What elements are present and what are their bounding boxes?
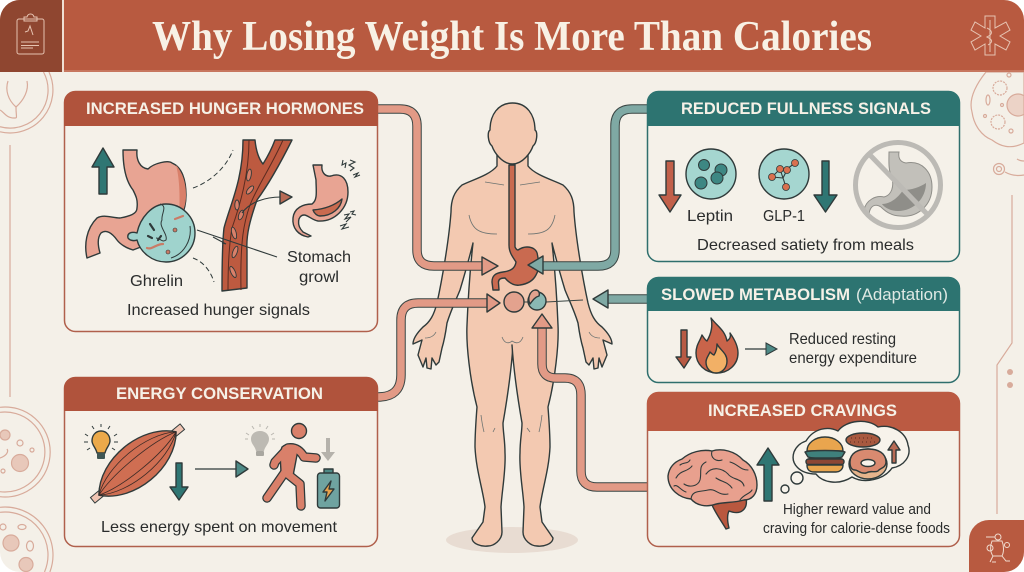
- arrow: left bottom connector: [378, 294, 500, 397]
- icon: GLP-1 circle: [759, 149, 809, 199]
- decoration: right cell top: [971, 72, 1024, 147]
- label: Leptin: Leptin: [687, 208, 733, 225]
- head: [488, 103, 537, 164]
- panel: increased hunger hormones: [64, 91, 378, 332]
- icon: walking person: [267, 424, 316, 506]
- body silhouette right half: [512, 150, 612, 546]
- icon box: clipboard: [0, 0, 62, 72]
- icon: small up arrow: [888, 441, 900, 463]
- caption: Decreased satiety from meals: [697, 237, 914, 254]
- decoration: right circuit line: [994, 159, 1024, 514]
- icon: up arrow: [92, 148, 114, 194]
- caption: Less energy spent on movement: [101, 519, 338, 536]
- body silhouette left half: [413, 150, 513, 546]
- icon: blood vessel: [222, 140, 292, 291]
- arrow: right middle connector: [593, 290, 647, 308]
- icon: flame: [696, 318, 738, 373]
- panel: reduced fullness signals: [647, 91, 960, 262]
- heading: REDUCED FULLNESS SIGNALS: [681, 100, 931, 118]
- icon: muscle: [90, 423, 186, 504]
- icon: thought bubble: [781, 421, 909, 493]
- arrow: to caption: [745, 343, 777, 355]
- panel: energy conservation: [64, 377, 378, 546]
- organs: gut and target circles: [504, 290, 583, 312]
- decoration: stethoscope emblem: [0, 72, 53, 133]
- caption: Reduced resting: [789, 331, 896, 348]
- arrow: right bottom connector: [532, 314, 647, 487]
- icon: crossed-out stomach: [856, 142, 940, 228]
- heading suffix: (Adaptation): [856, 286, 948, 304]
- label: Stomach growl: growl: [299, 269, 339, 286]
- heading: INCREASED CRAVINGS: [708, 402, 897, 420]
- title banner: [0, 0, 1024, 72]
- caption second line: energy expenditure: [789, 350, 917, 367]
- label: GLP-1: GLP-1: [763, 208, 805, 225]
- heading: SLOWED METABOLISM: [661, 286, 850, 304]
- title text: Why Losing Weight Is More Than Calories: [152, 14, 872, 60]
- icon: patty: [846, 433, 880, 447]
- arrow: to person: [195, 461, 248, 477]
- panel: slowed metabolism: [647, 277, 960, 382]
- icon: star of life: [971, 16, 1010, 55]
- decoration: left cell bottom: [0, 507, 53, 572]
- panel: increased cravings: [647, 392, 960, 546]
- arrow: left top connector: [378, 109, 498, 275]
- body contour lines: [425, 182, 600, 432]
- icon: red down arrow: [659, 161, 681, 212]
- icon: red down arrow: [676, 330, 691, 368]
- caption: Higher reward value and: [783, 501, 931, 518]
- esophagus and stomach: [492, 165, 538, 290]
- body figure: [378, 103, 647, 553]
- icon: teal down arrow: [814, 161, 837, 212]
- icon: brain: [668, 450, 757, 529]
- icon: battery: [318, 469, 340, 508]
- ground shadow: [446, 527, 578, 553]
- decoration: left cell top: [0, 407, 50, 497]
- curved arrow: [242, 191, 292, 213]
- icon: grey down arrow: [321, 438, 335, 461]
- icon: lit bulb: [84, 424, 118, 459]
- icon: stomach with ghrelin cell: [86, 150, 195, 262]
- icon: burger: [805, 437, 845, 472]
- caption second line: craving for calorie-dense foods: [763, 520, 950, 537]
- label: Stomach growl: Stomach: [287, 249, 351, 266]
- heading: INCREASED HUNGER HORMONES: [86, 100, 364, 118]
- heading: ENERGY CONSERVATION: [116, 385, 323, 403]
- decoration: left vertical line: [9, 145, 11, 397]
- label: Ghrelin: Ghrelin: [130, 273, 183, 290]
- icon: teal up arrow: [757, 448, 779, 501]
- icon: dim bulb: [245, 424, 275, 456]
- icon: teal down arrow: [170, 463, 188, 500]
- arrow: right top connector: [528, 109, 647, 274]
- icon: leptin circle: [686, 149, 736, 199]
- corner badge: body figure icon: [969, 520, 1024, 572]
- pointer lines: [197, 230, 277, 257]
- label: Stomach growl: [287, 249, 351, 286]
- caption: Increased hunger signals: [127, 302, 310, 319]
- dashed connectors: [193, 150, 233, 282]
- icon: donut: [849, 449, 887, 479]
- icon: growling stomach: [293, 160, 360, 237]
